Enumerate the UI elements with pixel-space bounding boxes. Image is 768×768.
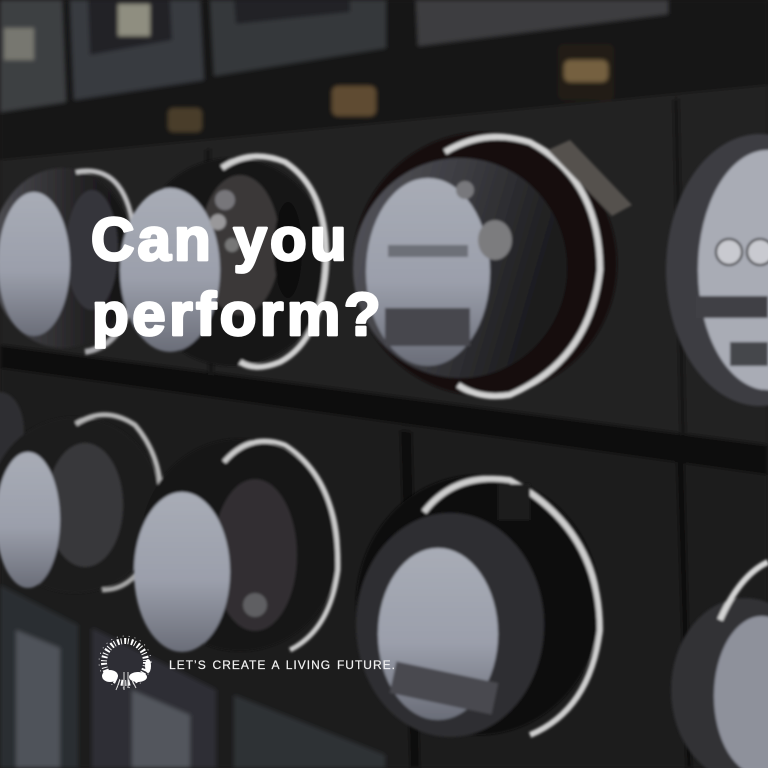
meter top 1 xyxy=(0,168,135,352)
meter bottom 2 xyxy=(134,439,340,652)
bottom boxes xyxy=(0,585,78,768)
meter top 4 xyxy=(666,134,768,406)
title xyxy=(91,206,382,348)
meter top 2 xyxy=(120,156,330,367)
tagline: LET’S CREATE A LIVING FUTURE. xyxy=(169,658,395,672)
lower panel xyxy=(0,368,768,768)
meter bottom 1 xyxy=(0,415,161,593)
meter top 3 xyxy=(353,132,632,396)
logo: dandelion icon xyxy=(99,636,151,690)
meter bottom 0 xyxy=(0,392,24,468)
meter bottom 3 xyxy=(356,475,600,737)
title: Can you xyxy=(91,206,348,273)
meter bottom 4 xyxy=(671,562,768,768)
top metal boxes xyxy=(0,0,768,150)
upper panel xyxy=(0,85,768,445)
title: perform? xyxy=(92,281,382,348)
